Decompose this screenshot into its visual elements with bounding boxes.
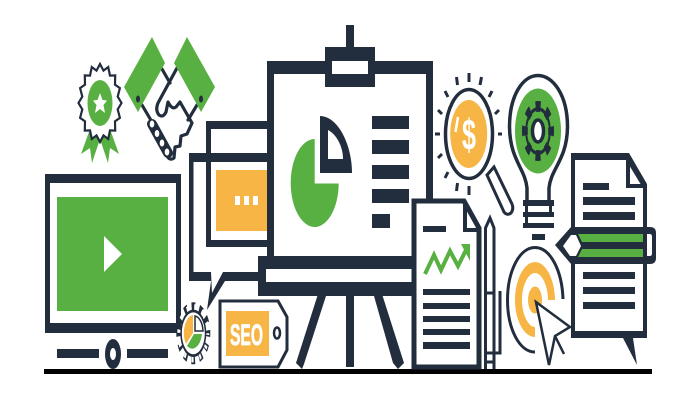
- baseline: [44, 369, 652, 374]
- pie chart: [291, 116, 352, 227]
- cursor arrow: [536, 302, 570, 365]
- presentation board on easel: [258, 25, 433, 369]
- vertical pen: [485, 218, 500, 369]
- board text lines: [372, 116, 409, 228]
- light rays: [435, 73, 502, 195]
- handshake with green cuffs: [124, 37, 215, 159]
- magnifying glass with dollar: [435, 73, 513, 214]
- target with cursor: [508, 248, 570, 365]
- magnifying glass with dollar: $: [462, 111, 476, 160]
- horizontal green pencil: [555, 227, 656, 264]
- SEO price tag: [220, 301, 287, 367]
- light bulb with gear: [510, 76, 568, 240]
- play icon: [104, 236, 122, 272]
- report document with growth chart: [414, 201, 479, 367]
- SEO price tag: SEO: [230, 319, 263, 352]
- award rosette: [78, 64, 122, 163]
- speech bubble with orange message: [189, 121, 270, 310]
- right speech document: [571, 153, 647, 365]
- video monitor: [45, 174, 181, 369]
- growth arrow: [425, 244, 470, 274]
- small gear with pie chart: [179, 308, 207, 359]
